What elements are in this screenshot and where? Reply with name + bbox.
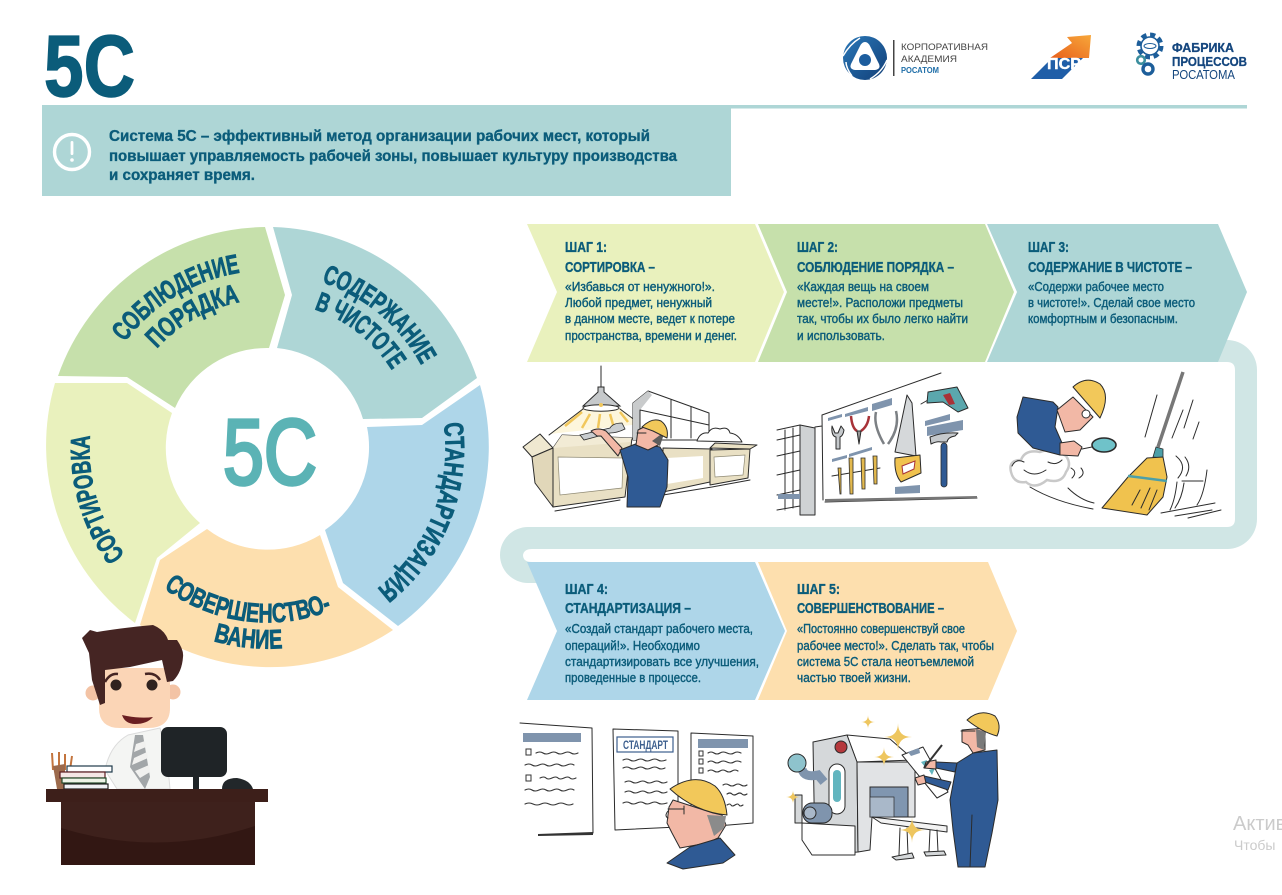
segment: cleanliness bbox=[273, 227, 477, 419]
worker with clipboard bbox=[902, 713, 999, 867]
segment: sorting bbox=[46, 383, 200, 623]
table bbox=[872, 817, 947, 860]
main title 5C: 5C bbox=[44, 18, 135, 115]
labels bbox=[828, 398, 963, 494]
hair bbox=[82, 625, 183, 705]
pencil holder bbox=[52, 752, 72, 789]
step 1 card: СОРТИРОВКА – bbox=[565, 260, 655, 276]
eyes and brows bbox=[105, 674, 160, 690]
middle sheet: СТАНДАРТ bbox=[623, 738, 668, 752]
valve arm bbox=[788, 754, 824, 782]
step 5 card: ШАГ 5: bbox=[797, 582, 840, 598]
step 4 card: «Создай стандарт рабочего места, bbox=[565, 622, 753, 636]
step 5 card: рабочее место!». Сделать так, чтобы bbox=[797, 639, 994, 653]
wrench tool bbox=[832, 426, 844, 449]
intro text: повышает управляемость рабочей зоны, повышает культуру производства bbox=[109, 148, 677, 165]
character at desk bbox=[46, 625, 268, 865]
stacked boxes bbox=[633, 391, 709, 440]
step 2 card: СОБЛЮДЕНИЕ ПОРЯДКА – bbox=[797, 260, 954, 276]
desk bbox=[46, 789, 268, 865]
right sheet bbox=[691, 733, 753, 826]
sparkle stars bbox=[786, 715, 925, 843]
logo: Rosatom process factory: ПРОЦЕССОВ bbox=[1172, 54, 1247, 69]
machine bbox=[813, 735, 915, 855]
illustration: cleaning bbox=[1010, 372, 1221, 518]
waste heap bbox=[697, 428, 742, 442]
segment: order: СОБЛЮДЕНИЕ bbox=[112, 254, 240, 340]
segment: cleanliness: В ЧИСТОТЕ bbox=[314, 292, 408, 370]
broom bbox=[1102, 372, 1183, 515]
step 2 card bbox=[758, 224, 1014, 362]
segment: cleanliness: СОДЕРЖАНИЕ bbox=[324, 266, 438, 365]
intro text: Система 5С – эффективный метод организации рабочих мест, который bbox=[109, 128, 650, 145]
segment: improvement bbox=[140, 529, 393, 668]
logo: Rosatom process factory: ФАБРИКА bbox=[1172, 40, 1235, 55]
step 4 card: ШАГ 4: bbox=[565, 582, 608, 598]
box 3 bbox=[710, 443, 757, 485]
watermark text bbox=[1233, 813, 1282, 853]
segment: sorting: СОРТИРОВКА bbox=[70, 436, 122, 563]
box 2 bbox=[663, 448, 712, 492]
dust cloud bbox=[1010, 450, 1094, 509]
step 3 card: «Содержи рабочее место bbox=[1028, 280, 1164, 294]
segment: order bbox=[58, 227, 285, 408]
saw bbox=[895, 395, 921, 482]
step 1 card: ШАГ 1: bbox=[565, 240, 607, 256]
step 3 card: ШАГ 3: bbox=[1028, 240, 1069, 256]
segment: standardization bbox=[325, 385, 489, 626]
step 3 card: в чистоте!». Сделай свое место bbox=[1028, 296, 1195, 310]
face bbox=[99, 668, 170, 728]
logo: Corporate Academy Rosatom: РОСАТОМ bbox=[901, 66, 939, 75]
phone bbox=[222, 778, 253, 789]
box 1 bbox=[523, 434, 750, 511]
step 5 card bbox=[758, 562, 1017, 700]
step 5 card: частью твоей жизни. bbox=[797, 671, 911, 685]
person with hard hat bbox=[666, 780, 735, 869]
step 3 card: СОДЕРЖАНИЕ В ЧИСТОТЕ – bbox=[1028, 260, 1192, 276]
segment: improvement: ВАНИЕ bbox=[214, 623, 282, 650]
illustration: sorting boxes bbox=[523, 366, 757, 511]
wheel centre label: 5C bbox=[223, 400, 317, 504]
step 1 card: пространства, времени и денег. bbox=[565, 329, 737, 343]
step 5 card: «Постоянно совершенствуй свое bbox=[797, 622, 965, 636]
step 4 card: СТАНДАРТИЗАЦИЯ – bbox=[565, 601, 691, 617]
step 2 card: ШАГ 2: bbox=[797, 240, 838, 256]
ears bbox=[86, 686, 100, 700]
step 5 card: система 5С стала неотъемлемой bbox=[797, 655, 974, 669]
step 2 card: «Каждая вещь на своем bbox=[797, 280, 929, 294]
step 1 card: в данном месте, ведет к потере bbox=[565, 312, 735, 326]
step 5 card: СОВЕРШЕНСТВОВАНИЕ – bbox=[797, 601, 944, 617]
screwdrivers bbox=[832, 456, 880, 494]
tie bbox=[130, 735, 150, 789]
shelving bbox=[777, 425, 815, 515]
wrench bbox=[580, 423, 625, 440]
motor and base bbox=[795, 795, 855, 855]
board outline bbox=[815, 373, 977, 502]
segment: order: ПОРЯДКА bbox=[144, 284, 240, 348]
worker with magnifier bbox=[1017, 380, 1116, 456]
intro text: и сохраняет время. bbox=[109, 167, 255, 184]
step 2 card: и использовать. bbox=[797, 329, 885, 343]
middle sheet bbox=[613, 729, 678, 830]
monitor bbox=[161, 727, 227, 789]
drill bbox=[921, 387, 968, 412]
connecting ribbon between steps bbox=[500, 340, 1257, 583]
logo: PSR: ПСР bbox=[1047, 56, 1081, 73]
step 1 card: Любой предмет, ненужный bbox=[565, 296, 712, 310]
pliers bbox=[851, 416, 869, 444]
logo: Rosatom process factory bbox=[1137, 35, 1247, 82]
lamp and light bbox=[549, 366, 640, 435]
watermark text: Чтобы bbox=[1234, 837, 1275, 853]
books bbox=[60, 766, 112, 789]
pincers bbox=[875, 411, 897, 444]
left sheet bbox=[520, 723, 593, 836]
worker bbox=[591, 420, 668, 507]
logo: Corporate Academy Rosatom bbox=[843, 36, 988, 80]
mouth bbox=[122, 715, 153, 724]
5C wheel bbox=[46, 227, 489, 668]
illustration: tool board bbox=[777, 373, 977, 515]
segment: standardization: СТАНДАРТИЗАЦИЯ bbox=[378, 422, 465, 603]
intro text bbox=[109, 128, 677, 184]
hammer bbox=[930, 433, 958, 487]
motion lines bbox=[1145, 395, 1221, 518]
logo: Rosatom process factory: РОСАТОМА bbox=[1172, 67, 1235, 82]
step 3 card bbox=[987, 224, 1247, 362]
step 3 card: комфортным и безопасным. bbox=[1028, 312, 1178, 326]
step 4 card: проведенные в процессе. bbox=[565, 671, 701, 685]
illustration: standards bbox=[520, 723, 753, 869]
step 2 card: так, чтобы их было легко найти bbox=[797, 312, 968, 326]
step 1 card bbox=[527, 224, 784, 362]
segment: improvement: СОВЕРШЕНСТВО- bbox=[166, 575, 330, 623]
shirt bbox=[105, 728, 170, 789]
illustration: machine inspection bbox=[786, 713, 999, 867]
icon: exclamation mark bbox=[54, 134, 90, 170]
logo: PSR bbox=[1031, 35, 1091, 79]
step 4 card: операций!». Необходимо bbox=[565, 639, 700, 653]
step 1 card: «Избавься от ненужного!». bbox=[565, 280, 715, 294]
step 2 card: месте!». Расположи предметы bbox=[797, 296, 963, 310]
header rule and intro banner bbox=[42, 105, 1247, 196]
step 4 card: стандартизировать все улучшения, bbox=[565, 655, 759, 669]
step 4 card bbox=[527, 562, 785, 700]
logo: Corporate Academy Rosatom: АКАДЕМИЯ bbox=[901, 54, 957, 65]
logo: Corporate Academy Rosatom: КОРПОРАТИВНАЯ bbox=[901, 42, 988, 53]
